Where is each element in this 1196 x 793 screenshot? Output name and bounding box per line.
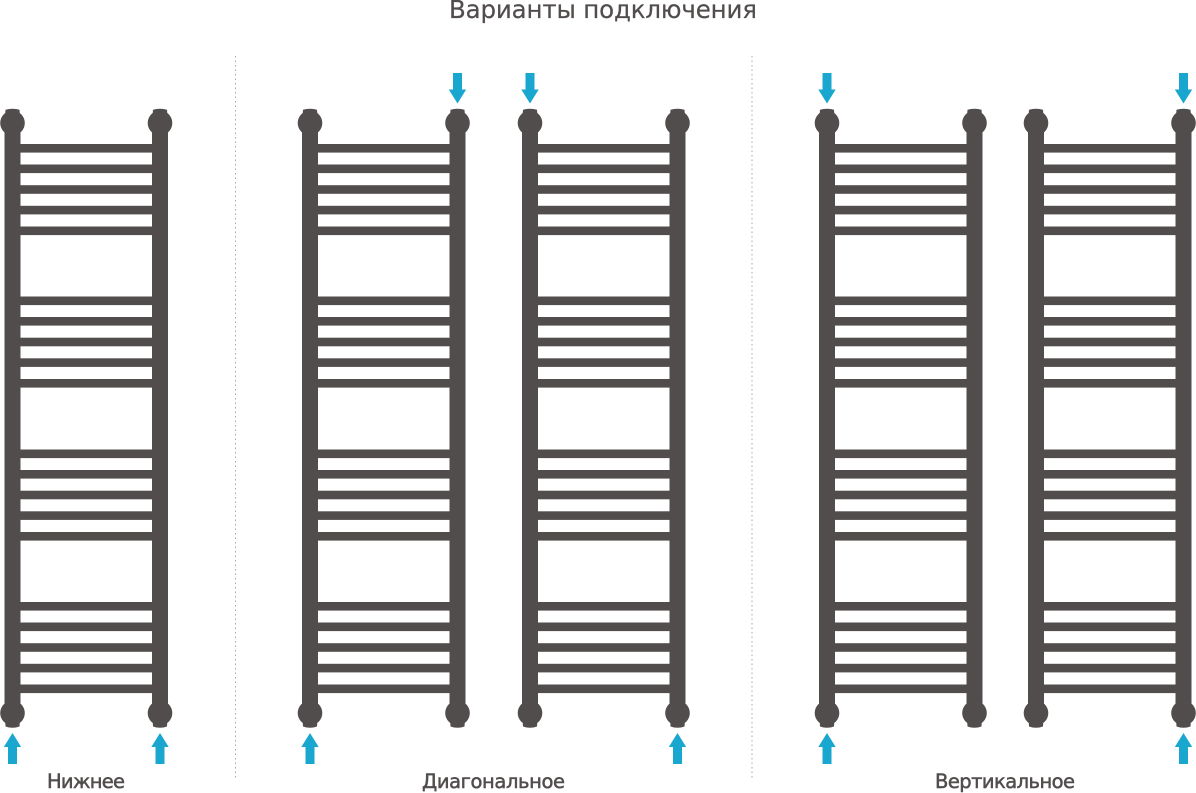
panel: vertical connection: [815, 73, 1196, 793]
towel rail 2: [298, 109, 470, 728]
label: diagonal connection: Диагональное: [422, 770, 565, 793]
arrow: bottom left inlet up: [818, 733, 836, 764]
towel rail 4: [815, 109, 987, 728]
divider: right dotted line: [751, 56, 753, 780]
panel: diagonal connection: [298, 73, 690, 793]
arrow: top right inlet down: [449, 73, 466, 104]
arrow: top left inlet down: [818, 73, 836, 104]
arrow: bottom right inlet up: [669, 733, 686, 764]
arrow: right inlet up: [151, 733, 169, 764]
label: vertical connection: Вертикальное: [935, 770, 1075, 793]
arrow: bottom right inlet up: [1175, 733, 1192, 764]
towel rail 1: [0, 109, 172, 728]
towel rail 5: [1024, 109, 1196, 728]
arrow: bottom left inlet up: [301, 733, 319, 764]
arrow: left inlet up: [4, 733, 21, 764]
towel rail 3: [518, 109, 690, 728]
label: bottom connection: Нижнее: [47, 770, 125, 793]
arrow: top right inlet down: [1175, 73, 1192, 104]
arrow: top left inlet down: [521, 73, 539, 104]
panel: bottom connection: [0, 109, 172, 793]
divider: left dotted line: [234, 56, 236, 780]
